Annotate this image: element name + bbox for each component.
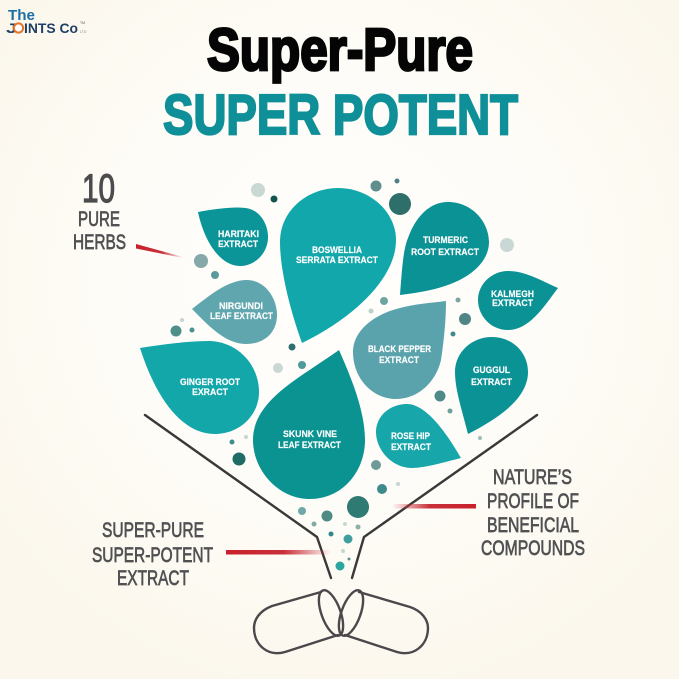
callout: 10 pure herbs [73, 167, 183, 258]
drop: Skunk Vine leaf extract: LEAF EXTRACT [278, 439, 341, 450]
callout: super-pure super-potent extract [92, 519, 331, 590]
drop: Kalmegh extract: KALMEGH [491, 288, 534, 299]
drop: Boswellia Serrata extract [280, 188, 396, 343]
callout: nature's profile of beneficial compounds [392, 466, 585, 560]
logo: The Joints Co: INTS Co [24, 20, 78, 36]
callout: super-pure super-potent extract: SUPER-POTENT [92, 544, 213, 567]
drop: Nirgundi leaf extract: NIRGUNDI [219, 300, 263, 311]
drop: Nirgundi leaf extract: LEAF EXTRACT [210, 310, 273, 321]
funnel [145, 415, 537, 578]
title: Super-Pure: Super-Pure [207, 17, 473, 83]
logo: The Joints Co: TM [80, 21, 85, 25]
drop: Guggul extract: EXTRACT [471, 376, 512, 387]
drop: Nirgundi leaf extract [192, 280, 277, 344]
drop: Guggul extract: GUGGUL [473, 364, 510, 375]
drop: Skunk Vine leaf extract: SKUNK VINE [283, 428, 337, 439]
drop: Turmeric root extract: ROOT EXTRACT [411, 246, 479, 257]
drop: Ginger root extract: EXRACT [192, 386, 228, 397]
logo: The Joints Co: J [6, 20, 17, 36]
callout: super-pure super-potent extract: SUPER-PURE [102, 519, 204, 542]
drop: Boswellia Serrata extract: BOSWELLIA [312, 244, 362, 255]
callout: nature's profile of beneficial compounds: COMPOUNDS [481, 537, 585, 560]
drop: Turmeric root extract [400, 202, 489, 295]
logo: The Joints Co: LTD [80, 30, 87, 34]
drop: Black Pepper extract: BLACK PEPPER [368, 343, 431, 354]
drop: Haritaki extract: EXTRACT [218, 238, 258, 249]
floating compound dots [170, 178, 514, 570]
drop: Black Pepper extract: EXTRACT [379, 354, 419, 365]
drop: Black Pepper extract [353, 301, 446, 399]
drop: Kalmegh extract: EXTRACT [492, 297, 533, 308]
icon: open capsule [254, 587, 428, 653]
drop: Rose Hip extract: ROSE HIP [391, 430, 430, 441]
callout: 10 pure herbs: 10 [82, 167, 115, 211]
drop: Haritaki extract: HARITAKI [218, 228, 259, 239]
callout: nature's profile of beneficial compounds: NATURE’S [493, 466, 572, 489]
drop: Boswellia Serrata extract: SERRATA EXTRACT [296, 254, 378, 265]
logo: The Joints Co: The [8, 7, 35, 24]
drop: Skunk Vine leaf extract [253, 350, 365, 499]
callout: nature's profile of beneficial compounds: PROFILE OF [487, 490, 579, 513]
drop: Kalmegh extract [478, 271, 558, 330]
title: SUPER POTENT: SUPER POTENT [163, 83, 518, 147]
logo: The Joints Co [6, 7, 87, 36]
drop: Turmeric root extract: TURMERIC [423, 234, 468, 245]
drop: Guggul extract [455, 337, 528, 434]
drop: Ginger root extract [140, 341, 259, 434]
callout: super-pure super-potent extract: EXTRACT [117, 567, 189, 590]
callout: 10 pure herbs: HERBS [73, 231, 126, 254]
drop: Rose Hip extract [376, 404, 461, 468]
drop: Rose Hip extract: EXTRACT [391, 441, 431, 452]
drop: Haritaki extract [198, 208, 268, 266]
drop: Ginger root extract: GINGER ROOT [180, 376, 240, 387]
callout: 10 pure herbs: PURE [78, 208, 120, 231]
callout: nature's profile of beneficial compounds: BENEFICIAL [487, 514, 579, 537]
